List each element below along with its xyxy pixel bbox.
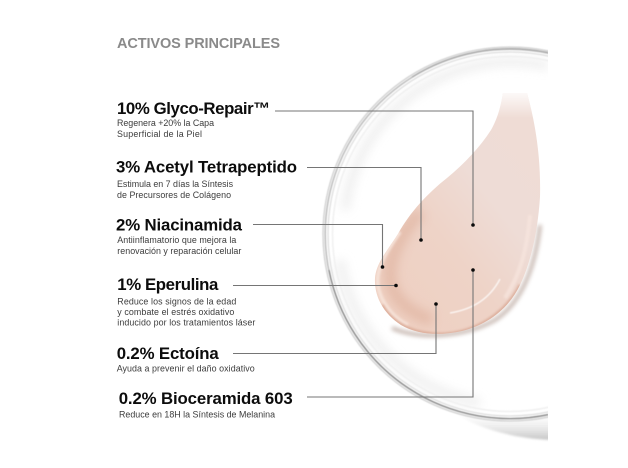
callout: 10% Glyco-Repair: Regenera +20% la Capa bbox=[117, 118, 214, 128]
callout: 3% Acetyl Tetrapeptido: Estimula en 7 días la Síntesis bbox=[117, 179, 234, 189]
callout: 0.2% Bioceramida 603: 0.2% Bioceramida 603 bbox=[119, 389, 293, 408]
callout: 3% Acetyl Tetrapeptido: 3% Acetyl Tetrapeptido bbox=[116, 158, 297, 177]
callout: 2% Niacinamida: Antiinflamatorio que mejora la bbox=[117, 235, 236, 245]
callout: 0.2% Ectoína: 0.2% Ectoína bbox=[117, 344, 219, 363]
cream soft shadow bbox=[392, 225, 540, 335]
callout: 2% Niacinamida: renovación y reparación celular bbox=[117, 246, 241, 256]
callout: 10% Glyco-Repair: Superficial de la Piel bbox=[117, 129, 202, 139]
callout: 1% Eperulina: 1% Eperulina bbox=[117, 275, 219, 294]
callout: 1% Eperulina: Reduce los signos de la edad bbox=[117, 296, 236, 306]
callout: 2% Niacinamida bbox=[116, 216, 384, 269]
callout: 3% Acetyl Tetrapeptido: de Precursores de Colágeno bbox=[117, 190, 231, 200]
callout: 1% Eperulina bbox=[117, 275, 398, 328]
cream swatch bbox=[375, 88, 540, 335]
callout: 10% Glyco-Repair: 10% Glyco-Repair™ bbox=[117, 99, 270, 118]
callout: 0.2% Ectoína bbox=[117, 302, 438, 374]
petri dish bbox=[322, 46, 548, 441]
title: ACTIVOS PRINCIPALES bbox=[117, 36, 280, 52]
callout: 3% Acetyl Tetrapeptido bbox=[116, 158, 423, 242]
callout: 1% Eperulina: inducido por los tratamientos láser bbox=[117, 318, 255, 328]
callout: 0.2% Bioceramida 603 bbox=[119, 268, 475, 420]
dish cast shadow bbox=[475, 421, 548, 441]
callout: 0.2% Ectoína: Ayuda a prevenir el daño oxidativo bbox=[117, 364, 255, 374]
callout: 2% Niacinamida: 2% Niacinamida bbox=[116, 216, 243, 235]
callout: 1% Eperulina: y combate el estrés oxidativo bbox=[117, 307, 234, 317]
callout: 0.2% Bioceramida 603: Reduce en 18H la Síntesis de Melanina bbox=[119, 410, 275, 420]
callout: 10% Glyco-Repair bbox=[117, 99, 475, 227]
